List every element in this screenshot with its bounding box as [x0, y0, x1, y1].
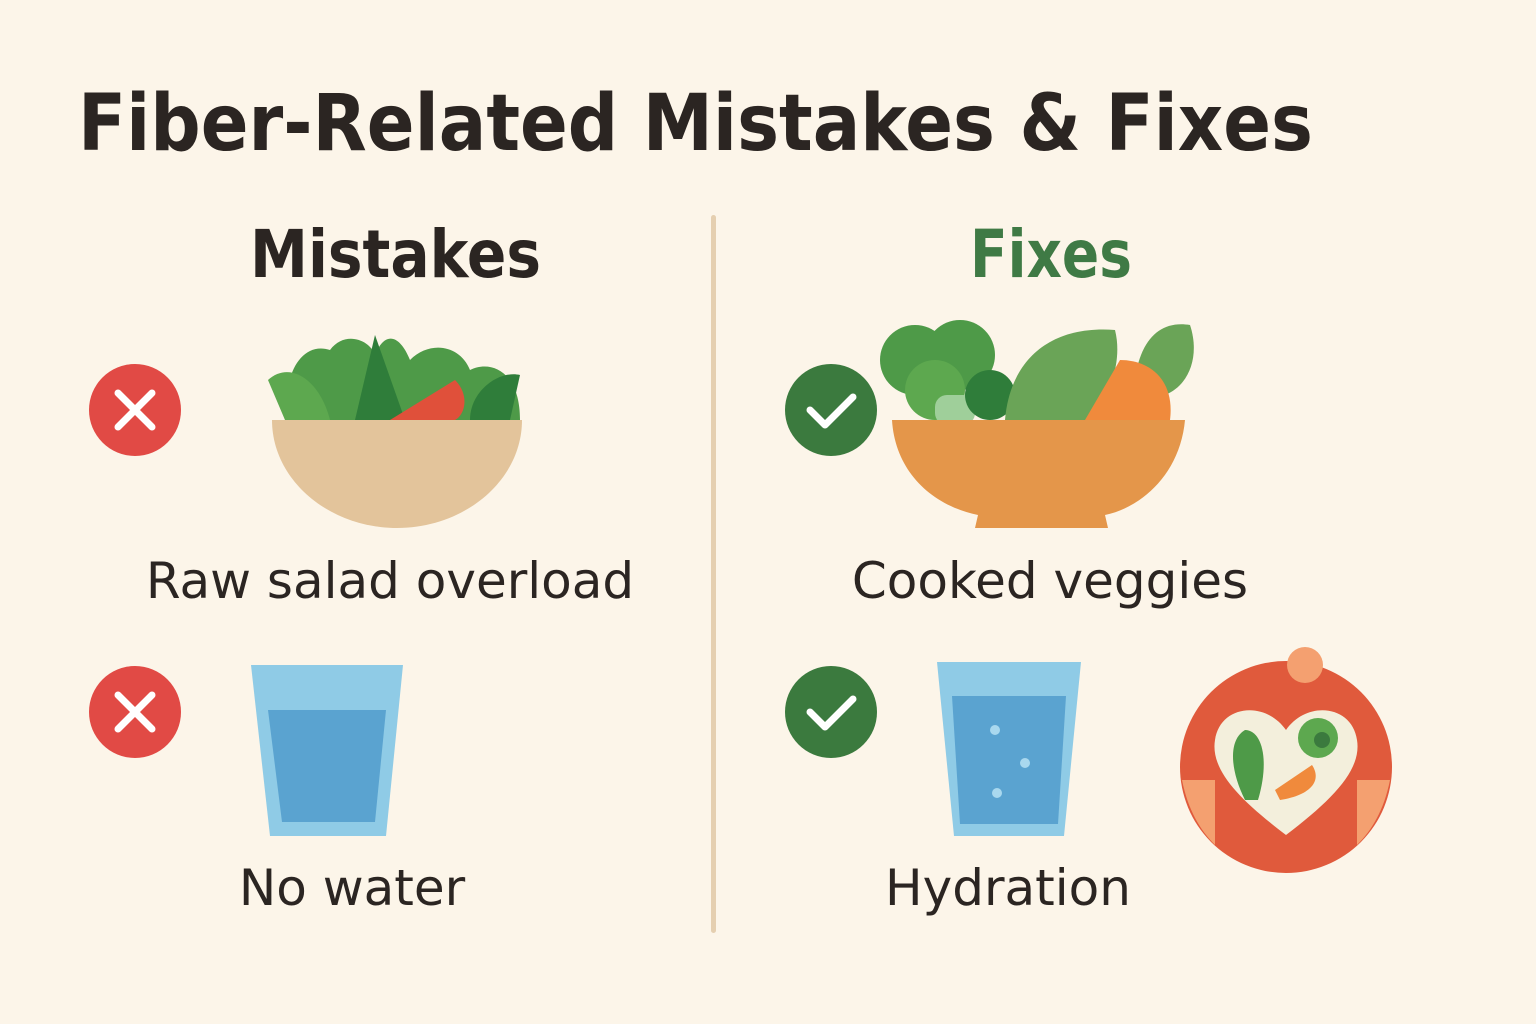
heading: mistakes: Mistakes [250, 216, 541, 293]
icon: green check 2 [785, 666, 877, 758]
icon: glass empty [251, 665, 403, 836]
icon: red x 2 [89, 666, 181, 758]
icon: cooked veggies bowl [880, 320, 1194, 528]
icon: green check 1 [785, 364, 877, 456]
icon: glass full [937, 662, 1081, 836]
label: no water: No water [239, 859, 466, 917]
icon: red x 1 [89, 364, 181, 456]
icon: heart badge [1180, 647, 1392, 873]
icon: raw salad bowl [268, 335, 522, 528]
label: hydration: Hydration [885, 859, 1131, 917]
label: raw salad: Raw salad overload [146, 552, 634, 610]
heading: fixes: Fixes [970, 216, 1132, 293]
label: cooked veggies: Cooked veggies [852, 552, 1248, 610]
title: Fiber-Related Mistakes & Fixes [78, 79, 1313, 169]
